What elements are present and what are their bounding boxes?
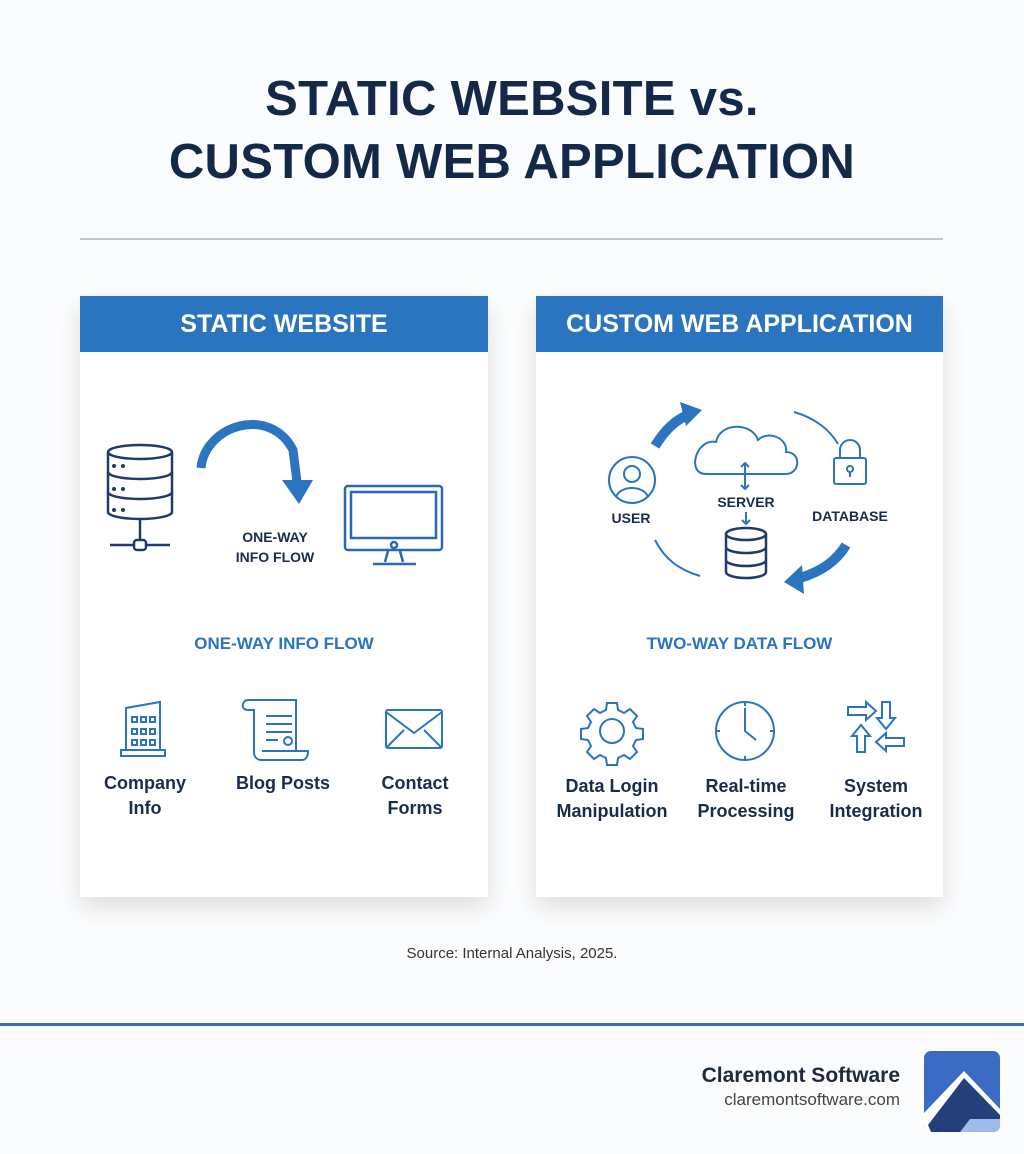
footer brand text: Claremont Software	[702, 1064, 900, 1087]
labels: DATABASE	[812, 508, 888, 524]
footer brand text	[702, 1064, 900, 1109]
label: data login manipulation: Data Login	[566, 776, 658, 796]
label: real-time processing: Processing	[697, 801, 795, 821]
icon: monitor	[345, 486, 442, 564]
icon: cloud	[695, 427, 797, 474]
title: CUSTOM WEB APPLICATION	[169, 135, 855, 189]
footer brand text: claremontsoftware.com	[724, 1090, 900, 1109]
caption: two-way data flow: TWO-WAY DATA FLOW	[647, 634, 832, 653]
heading: custom web application	[536, 296, 943, 352]
source note: Source: Internal Analysis, 2025.	[407, 945, 617, 962]
label: company info	[104, 773, 186, 818]
logo	[924, 1051, 1000, 1132]
labels	[612, 494, 888, 526]
icon: database	[726, 512, 766, 578]
arrow: top-left curved	[655, 402, 702, 446]
heading: static website: STATIC WEBSITE	[180, 310, 388, 338]
icon: envelope	[386, 710, 442, 748]
label: data login manipulation: Manipulation	[556, 801, 668, 821]
label: contact forms: Contact	[382, 773, 448, 793]
label: blog posts: Blog Posts	[236, 773, 330, 793]
title: STATIC WEBSITE vs.	[265, 72, 759, 126]
diagram: one-way flow: INFO FLOW	[236, 549, 315, 565]
label: real-time processing	[697, 776, 795, 821]
arc: top-right	[794, 412, 838, 444]
labels: SERVER	[717, 494, 775, 510]
labels: USER	[612, 510, 650, 526]
heading: static website	[80, 296, 488, 352]
icon: building	[121, 702, 165, 756]
label: system integration	[830, 776, 922, 821]
caption: one-way info flow: ONE-WAY INFO FLOW	[194, 634, 374, 653]
label: system integration: System	[844, 776, 908, 796]
diagram: two-way data flow	[580, 402, 905, 766]
label: system integration: Integration	[830, 801, 922, 821]
label: contact forms	[382, 773, 448, 818]
icon: gear	[581, 703, 643, 765]
icon: user	[609, 457, 655, 503]
panel: static website	[80, 296, 488, 897]
diagram: one-way flow	[106, 420, 444, 761]
arc: bottom-left	[655, 540, 700, 576]
arrow: bottom-right curved	[784, 545, 846, 594]
label: real-time processing: Real-time	[705, 776, 787, 796]
panel: custom web application	[536, 296, 943, 897]
label: data login manipulation	[556, 776, 668, 821]
icon: arrows	[848, 702, 904, 752]
arrow: curved one-way	[201, 425, 313, 504]
title	[169, 72, 855, 189]
icon: lock	[834, 440, 866, 484]
icon: server	[108, 445, 172, 550]
label: one-way info flow: ONE-WAY	[242, 529, 308, 545]
label: company info: Company	[104, 773, 186, 793]
icon: scroll	[243, 700, 308, 760]
icon: clock	[716, 702, 774, 760]
heading: custom web application: CUSTOM WEB APPLICATION	[566, 310, 913, 338]
label: contact forms: Forms	[387, 798, 442, 818]
label: company info: Info	[128, 798, 162, 818]
